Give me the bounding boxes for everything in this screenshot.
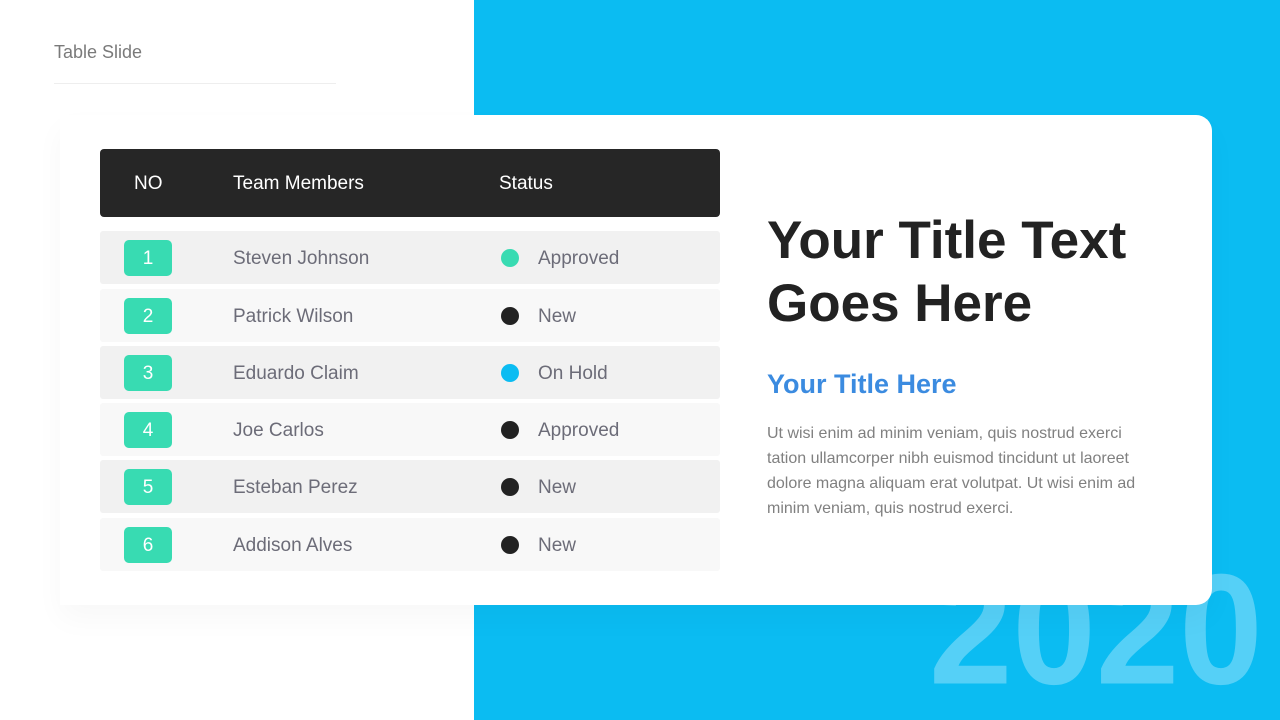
- row 6: [100, 518, 720, 571]
- row 5: New: [538, 477, 576, 498]
- year watermark: 2020: [929, 541, 1263, 717]
- subtitle: Your Title Here: [767, 369, 957, 399]
- row 4: Joe Carlos: [233, 420, 324, 441]
- row 4: Approved: [538, 420, 619, 441]
- table header: NO: [134, 173, 162, 194]
- row 2: New: [538, 306, 576, 327]
- table header: Status: [499, 173, 553, 194]
- row 4: 4: [143, 420, 153, 441]
- page label: Table Slide: [54, 42, 142, 62]
- row 6: Addison Alves: [233, 535, 352, 556]
- blue background panel: [474, 0, 1280, 720]
- row 3: 3: [143, 363, 153, 384]
- row 1: 1: [143, 248, 153, 269]
- table header: Team Members: [233, 173, 364, 194]
- row 6: New: [538, 535, 576, 556]
- body text: Ut wisi enim ad minim veniam, quis nostrud exerci tation ullamcorper nibh euismod tincidunt ut laoreet dolore magna aliquam erat volutpat. Ut wisi enim ad minim veniam, quis nostrud exerci.: [767, 425, 1135, 517]
- row 5: Esteban Perez: [233, 477, 358, 498]
- row 2: [100, 289, 720, 342]
- row 5: 5: [143, 477, 153, 498]
- row 4: [100, 403, 720, 456]
- main title: Goes Here: [767, 274, 1032, 333]
- row 3: On Hold: [538, 363, 608, 384]
- white card: [60, 115, 1212, 605]
- row 1: Approved: [538, 248, 619, 269]
- row 1: [100, 231, 720, 284]
- main title: [767, 211, 1126, 333]
- row 1: Steven Johnson: [233, 248, 369, 269]
- row 5: [100, 460, 720, 513]
- row 6: 6: [143, 535, 153, 556]
- row 2: 2: [143, 306, 153, 327]
- table header: [100, 149, 720, 217]
- row 3: [100, 346, 720, 399]
- row 2: Patrick Wilson: [233, 306, 353, 327]
- row 3: Eduardo Claim: [233, 363, 359, 384]
- main title: Your Title Text: [767, 211, 1126, 270]
